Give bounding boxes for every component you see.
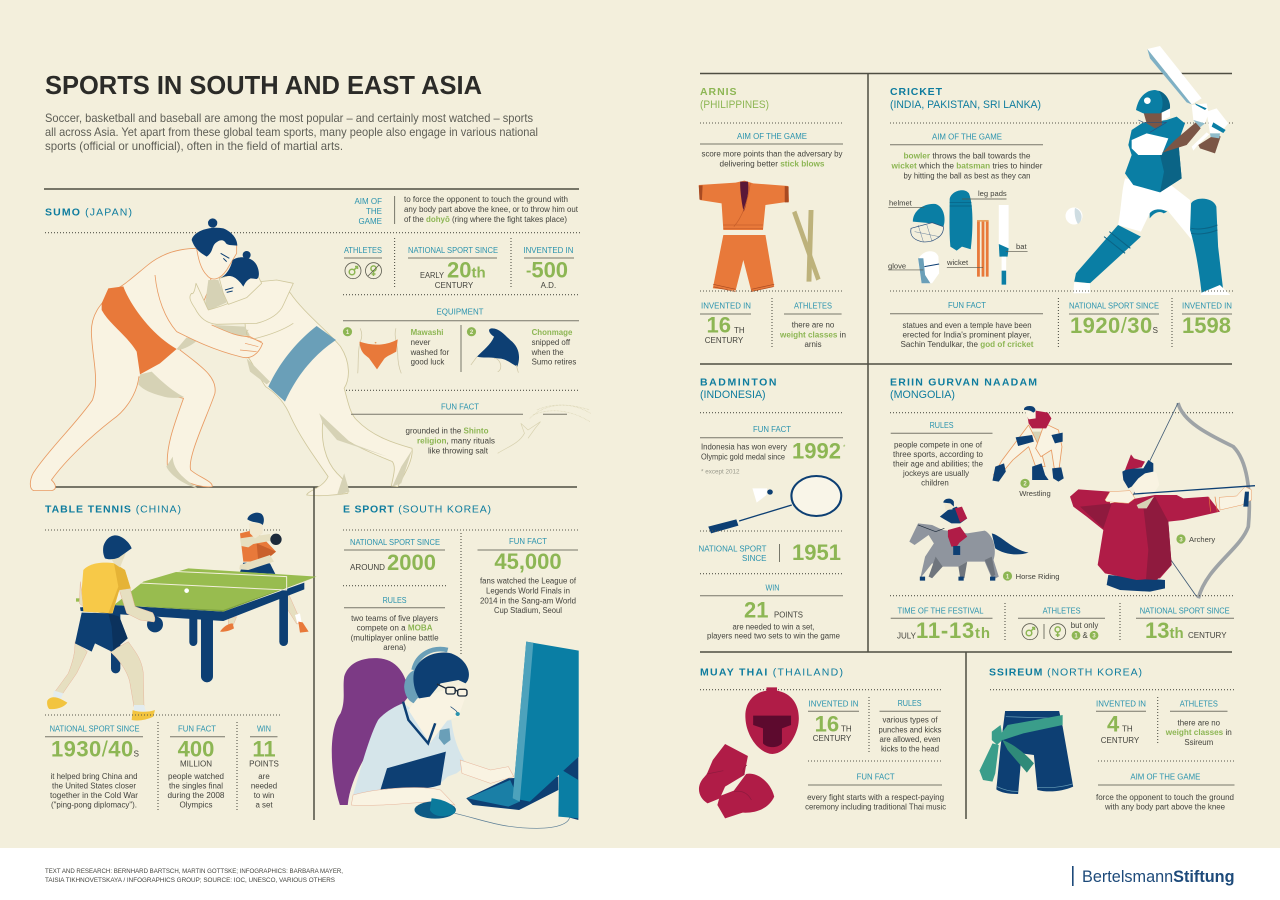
icon: cricket ball — [1066, 208, 1082, 224]
national sport since — [408, 246, 498, 290]
fun fact 1992: Indonesia has won every — [701, 443, 787, 452]
intro text: all across Asia. Yet apart from these global team sports, many people also engage in various national — [45, 125, 538, 139]
stat: invented in: 4 — [1107, 712, 1120, 737]
stat: win 11 points — [249, 724, 279, 810]
stat: athletes: 1 — [1074, 634, 1078, 640]
aim of the game: THE — [366, 207, 382, 216]
stat: fun fact 400 million: Olympics — [180, 801, 213, 810]
fun fact 45,000 — [478, 537, 578, 615]
stat: national sport since: NATIONAL SPORT SINCE — [1069, 302, 1159, 311]
badge 1 — [343, 327, 352, 336]
stat: fun fact 400 million: FUN FACT — [178, 724, 216, 733]
intro text: Soccer, basketball and baseball are among the most popular – and certainly most watched – sports — [45, 111, 533, 125]
stat: national sport since: NATIONAL SPORT SINCE — [50, 724, 140, 733]
heading: naadam — [890, 376, 1037, 401]
intro text: sports (official or unofficial), often in the field of martial arts. — [45, 139, 343, 153]
stat: fun fact 400 million: during the 2008 — [168, 791, 225, 800]
equipment diagram — [888, 189, 1028, 285]
stat: win 21 points: players need two sets to win the game — [707, 632, 841, 641]
rules: are allowed, even — [880, 735, 940, 744]
stat: national sport since: the United States closer — [52, 781, 136, 790]
label: archery: Archery — [1189, 535, 1215, 544]
stat: invented in: CENTURY — [1101, 736, 1140, 745]
stat: invented in: INVENTED IN — [1096, 700, 1146, 709]
fun fact 45,000: 2014 in the Sang-am World — [480, 597, 576, 606]
equipment diagram: glove — [888, 262, 906, 270]
fun fact: FUN FACT — [441, 402, 479, 411]
chonmage text: Chonmage — [532, 328, 573, 337]
fun fact: FUN FACT — [857, 772, 895, 781]
rules: three sports, according to — [893, 450, 984, 459]
heading: badminton: BADMINTON — [700, 376, 776, 388]
equipment: EQUIPMENT — [436, 308, 484, 317]
fun fact 45,000: fans watched the League of — [480, 577, 577, 586]
aim of the game: bowler throws the ball towards the — [904, 152, 1031, 161]
fun fact: every fight starts with a respect-paying — [807, 793, 944, 802]
stat: national sport since: ("ping-pong diplomacy"). — [51, 801, 137, 810]
badge 1: 1 — [346, 330, 350, 336]
heading: cricket: (INDIA, PAKISTAN, SRI LANKA) — [890, 99, 1041, 111]
label: wrestling: Wrestling — [1019, 489, 1051, 498]
stat: invented in: INVENTED IN — [808, 700, 859, 709]
equipment — [343, 308, 579, 373]
illustration: racket and shuttlecock — [708, 476, 841, 533]
equipment diagram: helmet — [889, 198, 913, 208]
rules: various types of — [882, 716, 938, 725]
heading: table tennis: TABLE TENNIS (CHINA) — [45, 504, 181, 516]
stat: athletes: Ssireum — [1184, 738, 1214, 747]
badge 2 — [467, 327, 476, 336]
stat: athletes — [779, 302, 846, 349]
aim of the game: AIM OF — [354, 197, 382, 206]
aim of the game: any body part above the knee, or to throw him out — [404, 205, 579, 214]
stat: national sport since 1951 — [698, 540, 841, 565]
mawashi text: never — [411, 338, 431, 347]
heading: arnis: (PHILIPPINES) — [700, 99, 769, 111]
fun fact 1992: * — [843, 445, 846, 451]
national sport since: EARLY — [420, 271, 445, 280]
stat: national sport since 1951: SINCE — [742, 554, 766, 563]
stat: athletes: but only — [1071, 621, 1098, 630]
rules: arena) — [383, 643, 406, 652]
fun fact: ceremony including traditional Thai music — [805, 803, 946, 812]
fun fact 45,000: Cup Stadium, Seoul — [494, 606, 562, 615]
stat: win 11 points: needed — [251, 781, 277, 790]
stat: time of the festival: JULY — [897, 631, 917, 640]
fun fact — [351, 402, 590, 455]
national sport since: CENTURY — [435, 281, 474, 290]
stat: national sport since — [1136, 606, 1234, 643]
rules: their age and abilities; the — [893, 460, 984, 469]
heading: badminton: (INDONESIA) — [700, 389, 766, 401]
stat: fun fact 400 million: the singles final — [169, 781, 223, 790]
stat: national sport since: 2000 — [387, 550, 436, 575]
icon: male — [1022, 624, 1038, 640]
fun fact 1992: 1992 — [792, 438, 841, 463]
stat: win 11 points: a set — [255, 801, 273, 810]
rules: kicks to the head — [881, 745, 939, 754]
heading: sumo: SUMO (JAPAN) — [45, 207, 132, 219]
invented in: A.D. — [541, 281, 556, 290]
rules — [344, 596, 445, 652]
illustration: arnis uniform and sticks — [699, 181, 821, 292]
badge 2: 2 — [470, 330, 474, 336]
stat: national sport since: it helped bring China and — [50, 772, 138, 781]
stat: invented in — [1182, 302, 1232, 338]
panel: badminton — [698, 364, 1232, 641]
stat: win 11 points: 11 — [252, 737, 276, 762]
stat: invented in: INVENTED IN — [701, 302, 751, 311]
rules — [891, 421, 992, 488]
equipment drawings — [888, 190, 1028, 285]
illustration: gamer at computer — [332, 642, 579, 828]
heading: naadam: ERIIN GURVAN NAADAM — [890, 376, 1037, 388]
illustration: batsman — [1073, 46, 1230, 295]
stat: fun fact 400 million: 400 — [178, 737, 214, 762]
athletes: ATHLETES — [344, 246, 382, 255]
stat: win 21 points: are needed to win a set, — [732, 622, 814, 631]
aim of the game: AIM OF THE GAME — [932, 132, 1002, 141]
stat: athletes: there are no — [1178, 718, 1221, 727]
stat: athletes: arnis — [804, 340, 822, 349]
rules: RULES — [383, 596, 407, 605]
fun fact 1992: FUN FACT — [753, 425, 791, 434]
stat: athletes: & — [1082, 631, 1088, 640]
invented in — [523, 246, 574, 290]
stat: national sport since: NATIONAL SPORT SINCE — [350, 538, 440, 547]
heading: badminton — [700, 376, 776, 401]
aim of the game: AIM OF THE GAME — [737, 132, 807, 141]
chonmage text — [531, 328, 576, 367]
equipment diagram: leg pads — [978, 189, 1007, 198]
stat: national sport since — [344, 538, 445, 575]
fun fact 45,000: 45,000 — [494, 549, 562, 574]
stat: invented in — [1096, 700, 1146, 745]
rules: RULES — [930, 421, 954, 430]
label: horse riding: Horse Riding — [1016, 572, 1060, 581]
invented in: - — [526, 262, 531, 279]
illustration: archer and bow — [1070, 403, 1255, 598]
stat: athletes: weight classes in — [1165, 728, 1232, 737]
stat: time of the festival: 11-13th — [916, 618, 990, 643]
stat: win 11 points: POINTS — [249, 760, 279, 769]
panel: table tennis — [45, 487, 317, 820]
illustration: horse rider — [909, 499, 1029, 581]
player — [47, 535, 163, 720]
stat: national sport since: together in the Cold War — [50, 791, 138, 800]
stat: win 21 points: 21 — [744, 597, 768, 622]
mawashi text — [410, 328, 450, 367]
stat: invented in: 1598 — [1182, 313, 1231, 338]
stat: national sport since — [1069, 302, 1159, 338]
stat: fun fact 400 million: people watched — [168, 772, 224, 781]
stat: invented in: TH — [1122, 725, 1133, 734]
fun fact 45,000: FUN FACT — [509, 537, 547, 546]
stat: invented in: CENTURY — [705, 336, 744, 345]
heading: arnis: ARNIS — [700, 86, 736, 98]
illustration: table tennis players and table — [47, 513, 317, 720]
fun fact — [890, 301, 1043, 349]
stat: win 21 points: WIN — [766, 584, 780, 593]
fun fact: FUN FACT — [948, 301, 986, 310]
stat: win 21 points: POINTS — [774, 610, 803, 619]
icon: female — [1050, 624, 1066, 640]
heading: arnis — [700, 86, 769, 111]
label: wrestling — [1019, 479, 1051, 498]
label: wrestling: 2 — [1023, 482, 1027, 488]
rules: punches and kicks — [878, 725, 942, 734]
aim of the game: score more points than the adversary by — [702, 150, 843, 159]
stat: win 11 points: are — [258, 772, 270, 781]
aim of the game: by hitting the ball as best as they can — [904, 171, 1030, 180]
panel: arnis — [699, 73, 1232, 652]
panel: cricket — [888, 46, 1235, 349]
illustration: two sumo wrestlers — [30, 218, 412, 496]
stat: national sport since: NATIONAL SPORT SINCE — [1140, 606, 1230, 615]
icon: female excluded — [366, 263, 382, 279]
stat: invented in: 16 — [815, 712, 839, 737]
heading: cricket — [890, 86, 1041, 111]
stat: win 11 points: to win — [254, 791, 274, 800]
chonmage text: when the — [531, 348, 564, 357]
aim of the game — [1096, 772, 1234, 812]
mawashi text: good luck — [411, 358, 444, 367]
illustration: shorts and sash — [979, 711, 1073, 794]
icon: male allowed — [345, 263, 361, 279]
belly crease — [246, 323, 293, 339]
equipment diagram: bat — [1016, 242, 1027, 251]
panel: muay thai — [699, 652, 1232, 819]
stat: invented in — [700, 302, 751, 345]
stat: athletes: weight classes in — [779, 330, 846, 339]
aim of the game: wicket which the batsman tries to hinder — [890, 161, 1043, 170]
stat: national sport since: CENTURY — [1188, 631, 1227, 640]
title: SPORTS IN SOUTH AND EAST ASIA — [45, 70, 482, 100]
rules — [878, 699, 942, 754]
rules: two teams of five players — [351, 614, 438, 623]
footer band: TEXT AND RESEARCH: BERNHARD BARTSCH, MARTIN GOTTSKE; INFOGRAPHICS: BARBARA MAYER, — [45, 868, 343, 875]
national sport since: 20th — [447, 257, 486, 282]
rules: compete on a MOBA — [357, 624, 433, 633]
chonmage text: Sumo retires — [532, 358, 576, 367]
national sport since: NATIONAL SPORT SINCE — [408, 246, 498, 255]
label: archery — [1176, 534, 1215, 544]
invented in: 500 — [531, 257, 568, 282]
heading: e sport: E SPORT (SOUTH KOREA) — [343, 504, 491, 516]
rules: children — [921, 479, 949, 488]
stat: time of the festival — [891, 606, 992, 643]
intro text — [45, 111, 538, 153]
stat: national sport since 1951: NATIONAL SPORT — [698, 544, 767, 553]
heading: cricket: CRICKET — [890, 86, 943, 98]
icon: mawashi — [358, 328, 401, 373]
mawashi text: washed for — [410, 348, 450, 357]
stat: national sport since: 13th — [1145, 618, 1184, 643]
stat: athletes: ATHLETES — [794, 302, 832, 311]
chonmage text: snipped off — [532, 338, 571, 347]
panel: e sport — [332, 504, 579, 828]
stat: win 11 points: WIN — [257, 724, 271, 733]
aim of the game: with any body part above the knee — [1104, 803, 1226, 812]
fun fact 1992: * except 2012 — [701, 468, 740, 475]
stat: athletes: there are no — [792, 320, 835, 329]
stat: invented in: INVENTED IN — [1182, 302, 1232, 311]
heading: muay thai: MUAY THAI (THAILAND) — [700, 667, 843, 679]
stat: national sport since: 1930/40S — [51, 737, 139, 762]
table — [111, 610, 120, 673]
panel: ssireum — [979, 667, 1235, 812]
footer band: TAISIA TIKHNOVETSKAYA / INFOGRAPHICS GROUP; SOURCE: IOC, UNESCO, VARIOUS OTHERS — [45, 877, 335, 884]
stat: national sport since — [45, 724, 143, 810]
icon: hand throwing salt — [498, 405, 590, 453]
fun fact: religion, many rituals — [417, 436, 495, 445]
fun fact: like throwing salt — [428, 446, 489, 455]
aim of the game: AIM OF THE GAME — [1130, 772, 1200, 781]
equipment diagram: wicket — [946, 258, 969, 267]
opponent — [220, 513, 309, 633]
aim of the game: of the dohyō (ring where the fight takes place) — [404, 215, 567, 224]
fun fact 45,000: Legends World Finals in — [486, 587, 570, 596]
stat: athletes — [1165, 700, 1232, 747]
stat: national sport since 1951: 1951 — [792, 540, 841, 565]
invented in: INVENTED IN — [523, 246, 574, 255]
label: archery: 3 — [1179, 537, 1183, 543]
heading: naadam: (MONGOLIA) — [890, 389, 955, 401]
stat: invented in: TH — [734, 326, 745, 335]
stat: national sport since: AROUND — [350, 563, 385, 572]
stat: invented in — [808, 700, 859, 743]
panel: sumo — [30, 189, 590, 496]
panel: eriin gurvan naadam — [890, 376, 1255, 643]
aim of the game — [354, 195, 579, 226]
stat: invented in: 16 — [706, 313, 731, 338]
stat: fun fact 400 million: MILLION — [180, 760, 212, 769]
fun fact: erected for India's prominent player, — [902, 331, 1032, 340]
rules: (multiplayer online battle — [351, 633, 439, 642]
rules: jockeys are usually — [902, 469, 969, 478]
logo: Bertelsmann Stiftung: BertelsmannStiftung — [1082, 867, 1234, 886]
aim of the game: delivering better stick blows — [720, 160, 825, 169]
stat: invented in: CENTURY — [813, 734, 852, 743]
aim of the game: force the opponent to touch the ground — [1096, 793, 1234, 802]
fun fact: grounded in the Shinto — [406, 426, 489, 435]
rules: people compete in one of — [894, 440, 983, 449]
illustration: wrestlers — [992, 406, 1064, 482]
stat: athletes — [1018, 606, 1105, 640]
stat: national sport since: 1920/30S — [1070, 313, 1158, 338]
illustration: head guard and gloves — [699, 687, 799, 818]
heading: ssireum: SSIREUM (NORTH KOREA) — [989, 667, 1142, 679]
fun fact 1992 — [700, 425, 846, 475]
fun fact: statues and even a temple have been — [902, 321, 1032, 330]
aim of the game: GAME — [358, 217, 382, 226]
footer band — [0, 848, 1280, 900]
fun fact: Sachin Tendulkar, the god of cricket — [900, 340, 1034, 349]
stat: win 21 points — [700, 584, 843, 641]
fun fact — [805, 772, 946, 812]
rules: RULES — [898, 699, 922, 708]
aim of the game: to force the opponent to touch the ground with — [404, 195, 568, 204]
stat: fun fact 400 million — [168, 724, 225, 810]
aim of the game — [700, 132, 843, 169]
icon: chonmage — [471, 328, 519, 373]
stat: athletes: ATHLETES — [1043, 606, 1081, 615]
stat: athletes: 3 — [1092, 634, 1096, 640]
athletes — [344, 246, 382, 279]
fun fact 1992: Olympic gold medal since — [701, 452, 786, 461]
aim of the game — [890, 132, 1043, 180]
stat: time of the festival: TIME OF THE FESTIVAL — [898, 606, 984, 615]
stat: athletes: ATHLETES — [1180, 700, 1218, 709]
mawashi text: Mawashi — [411, 328, 443, 337]
label: horse riding: 1 — [1006, 574, 1010, 580]
stat: invented in: TH — [841, 725, 852, 734]
